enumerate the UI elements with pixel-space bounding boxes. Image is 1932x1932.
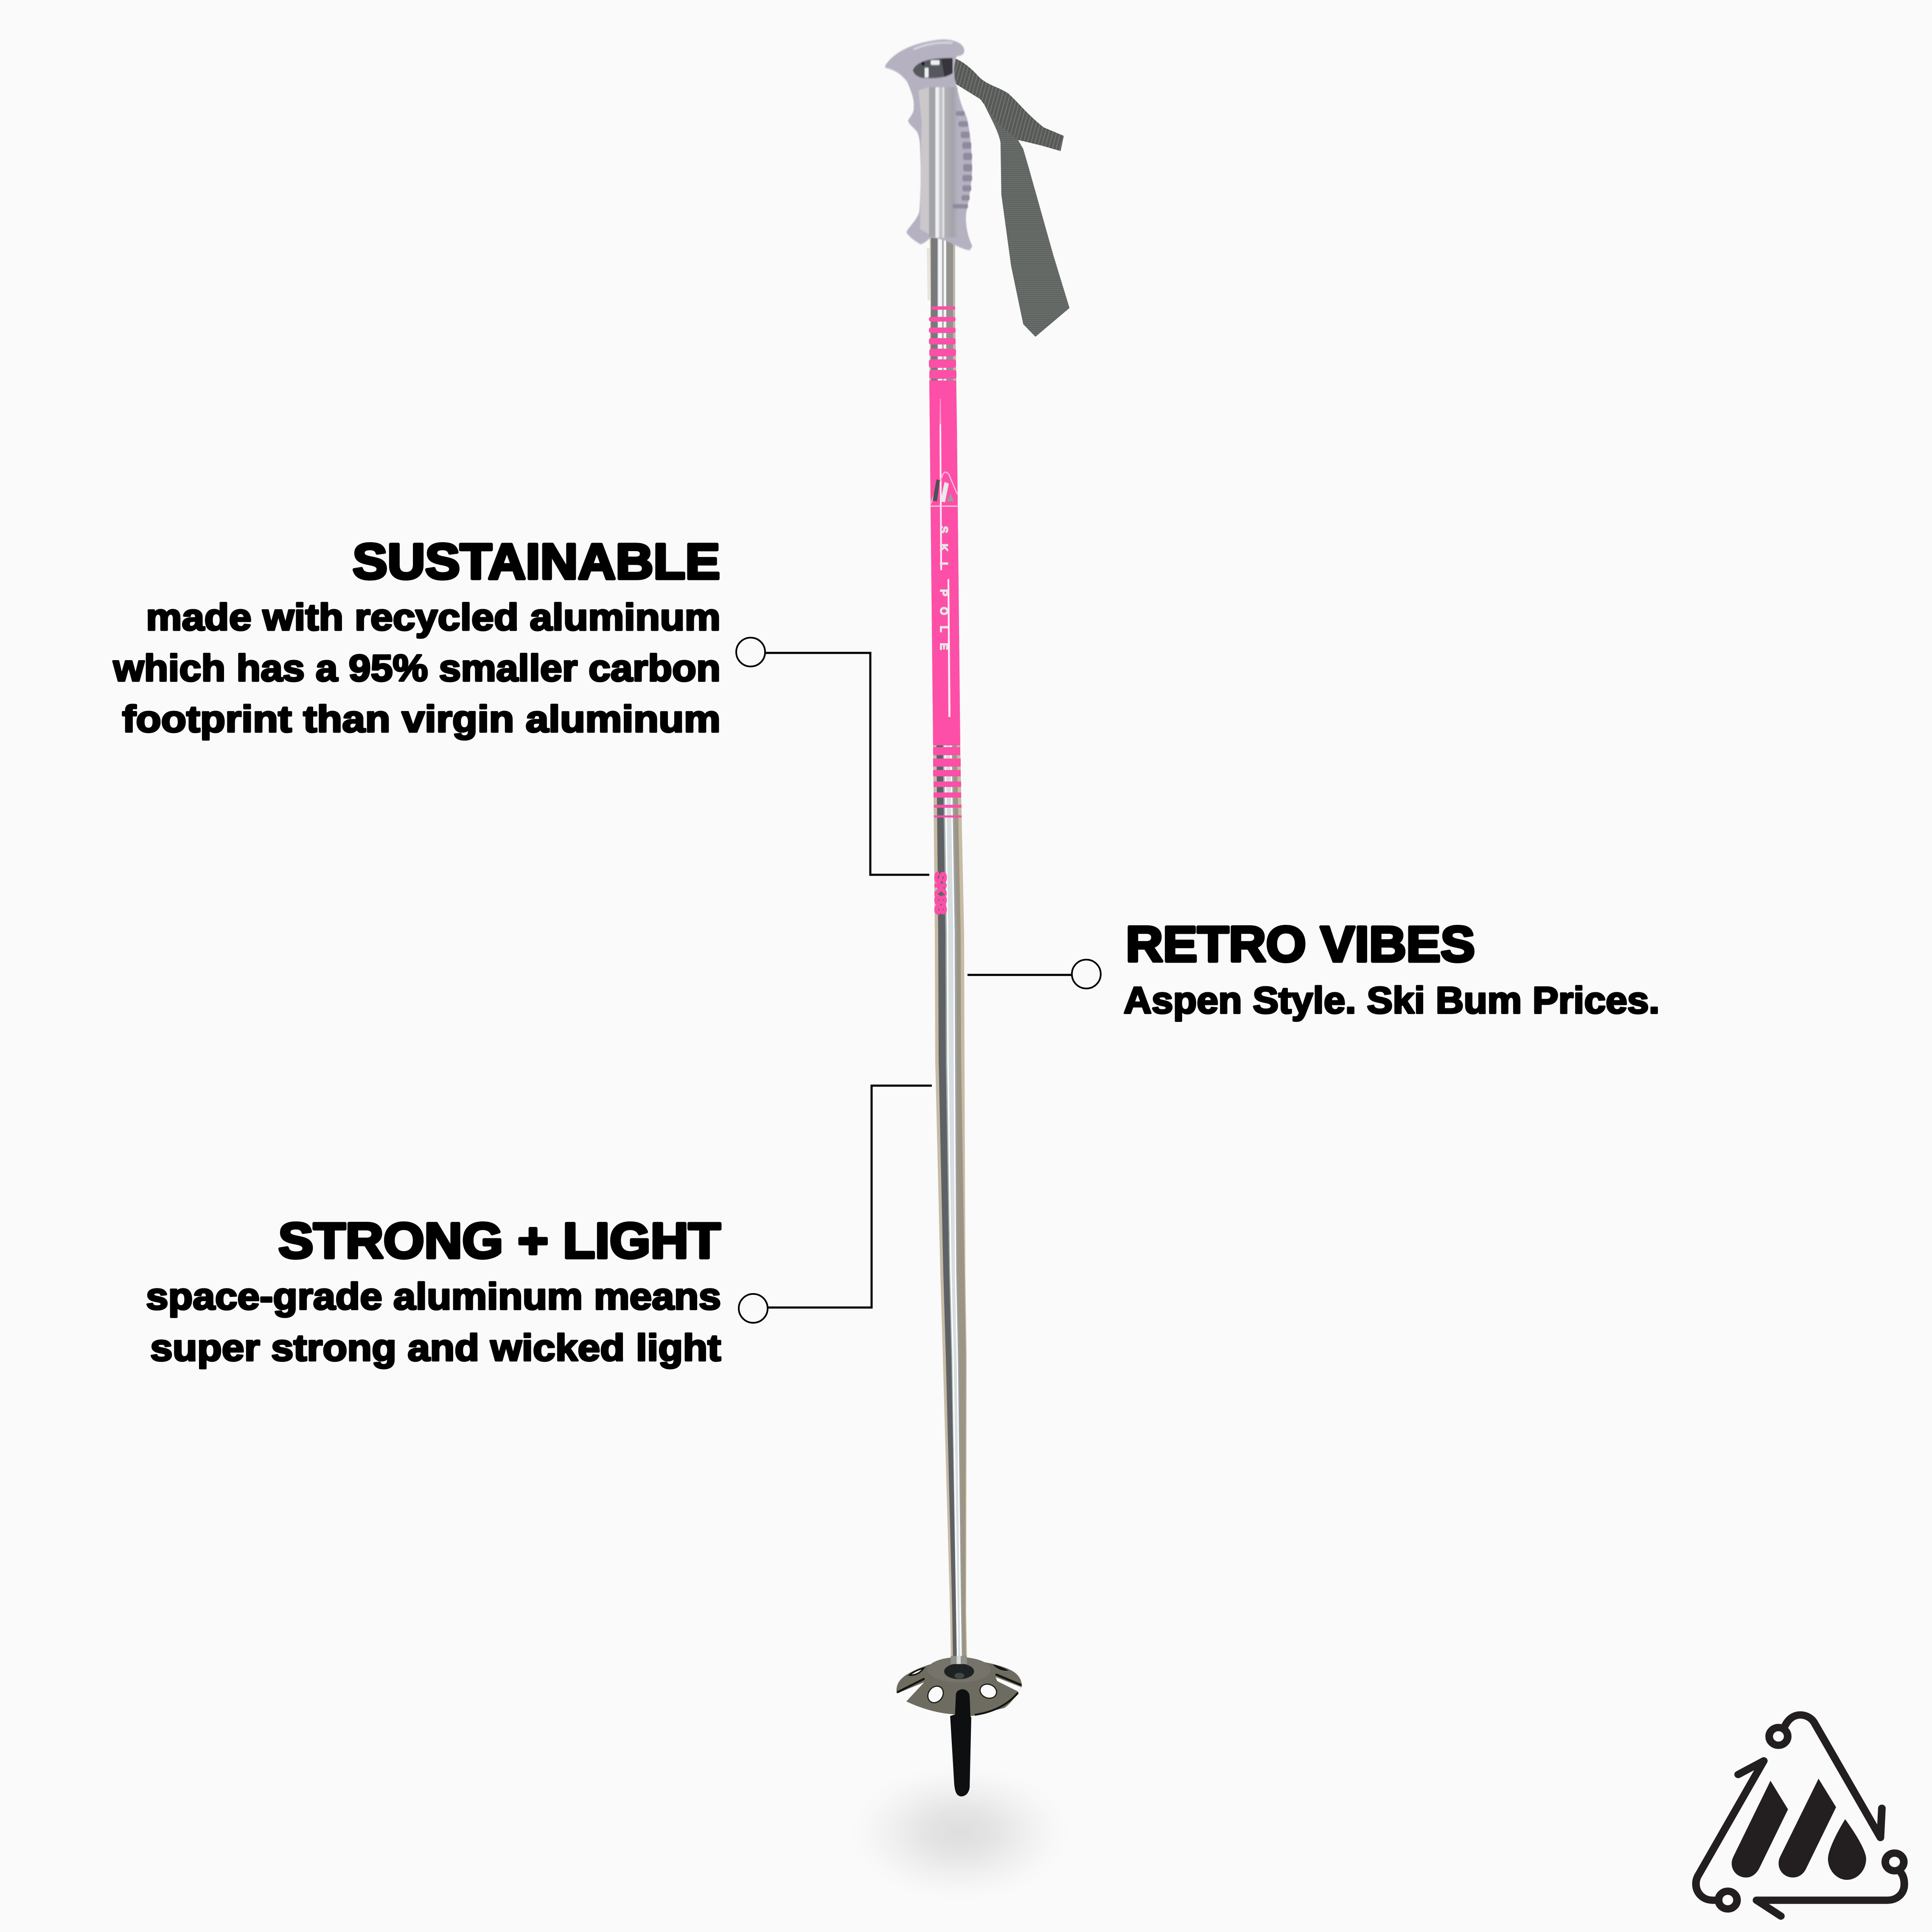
pole logo mark <box>930 472 957 506</box>
leader line <box>765 653 929 875</box>
strap <box>953 59 1069 337</box>
basket and tip <box>897 1656 1022 1796</box>
recycling arrows <box>1696 1715 1904 1916</box>
pole shaft <box>927 238 967 1664</box>
description: Aspen Style. Ski Bum Prices. <box>1124 979 1660 1021</box>
description: super strong and wicked light <box>150 1327 721 1369</box>
basket <box>897 1656 1022 1716</box>
grip <box>885 39 973 250</box>
heading: SUSTAINABLE <box>353 534 720 590</box>
description <box>146 1275 721 1369</box>
description: made with recycled aluminum <box>146 596 721 638</box>
callout: sustainable <box>113 534 929 875</box>
strap short tail <box>953 59 1064 151</box>
pink graphic section <box>929 306 962 818</box>
grip metal core <box>929 87 957 238</box>
callout: strong + light <box>146 1086 932 1369</box>
pink section highlights <box>939 399 951 717</box>
pole wordmark: SKI POLE <box>938 526 950 650</box>
ski pole product <box>885 39 1069 1796</box>
peak and drop shapes <box>1732 1779 1866 1880</box>
grip cap highlight <box>914 42 953 49</box>
description <box>113 596 721 740</box>
grip finger ridges <box>953 111 972 208</box>
brand logo: recycling triangle with peaks and drop <box>1696 1715 1904 1916</box>
upper shaft chrome <box>931 238 955 382</box>
marker <box>736 638 765 666</box>
description: space-grade aluminum means <box>146 1275 721 1317</box>
pink size mark: SK88 <box>932 872 949 914</box>
heading: RETRO VIBES <box>1126 916 1475 972</box>
tip <box>950 1689 971 1796</box>
description: which has a 95% smaller carbon <box>113 647 721 689</box>
marker <box>1072 960 1101 988</box>
leader line <box>967 974 1071 976</box>
callout: retro vibes <box>967 916 1660 1021</box>
ground shadow <box>847 1763 1072 1903</box>
grip top opening <box>913 58 953 78</box>
grip pale left panel <box>919 87 929 235</box>
marker <box>739 1294 768 1323</box>
heading: STRONG + LIGHT <box>278 1213 721 1269</box>
description: footprint than virgin aluminum <box>122 698 721 740</box>
leader line <box>768 1086 932 1308</box>
strap long loop <box>982 99 1069 337</box>
